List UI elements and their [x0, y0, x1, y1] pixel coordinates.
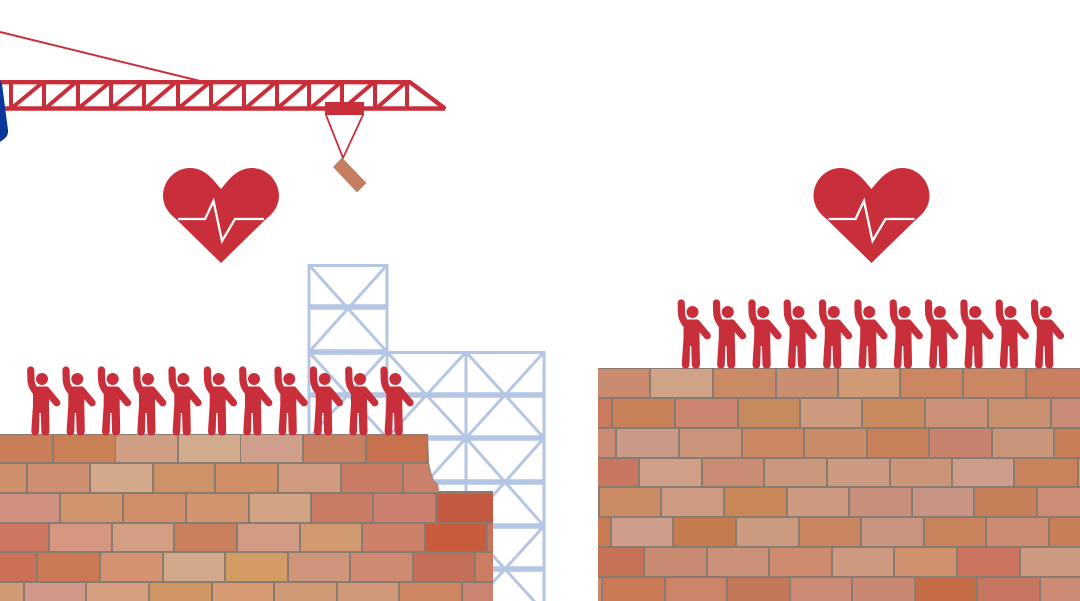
- left group of cheering people: [31, 370, 410, 436]
- crane cable: [0, 32, 200, 81]
- hanging brick: [334, 158, 366, 192]
- crane tower stub: [0, 80, 8, 142]
- heart icon right: [814, 168, 930, 263]
- hook block: [325, 102, 364, 115]
- crane: [0, 32, 445, 192]
- heart icon left: [163, 168, 279, 263]
- unfinished left brick wall: [0, 434, 493, 601]
- right group of cheering people: [681, 303, 1061, 368]
- complete right brick wall: [598, 368, 1080, 601]
- scaffolding: [308, 265, 546, 601]
- hook sling: [326, 115, 363, 158]
- crane jib truss: [0, 82, 445, 108]
